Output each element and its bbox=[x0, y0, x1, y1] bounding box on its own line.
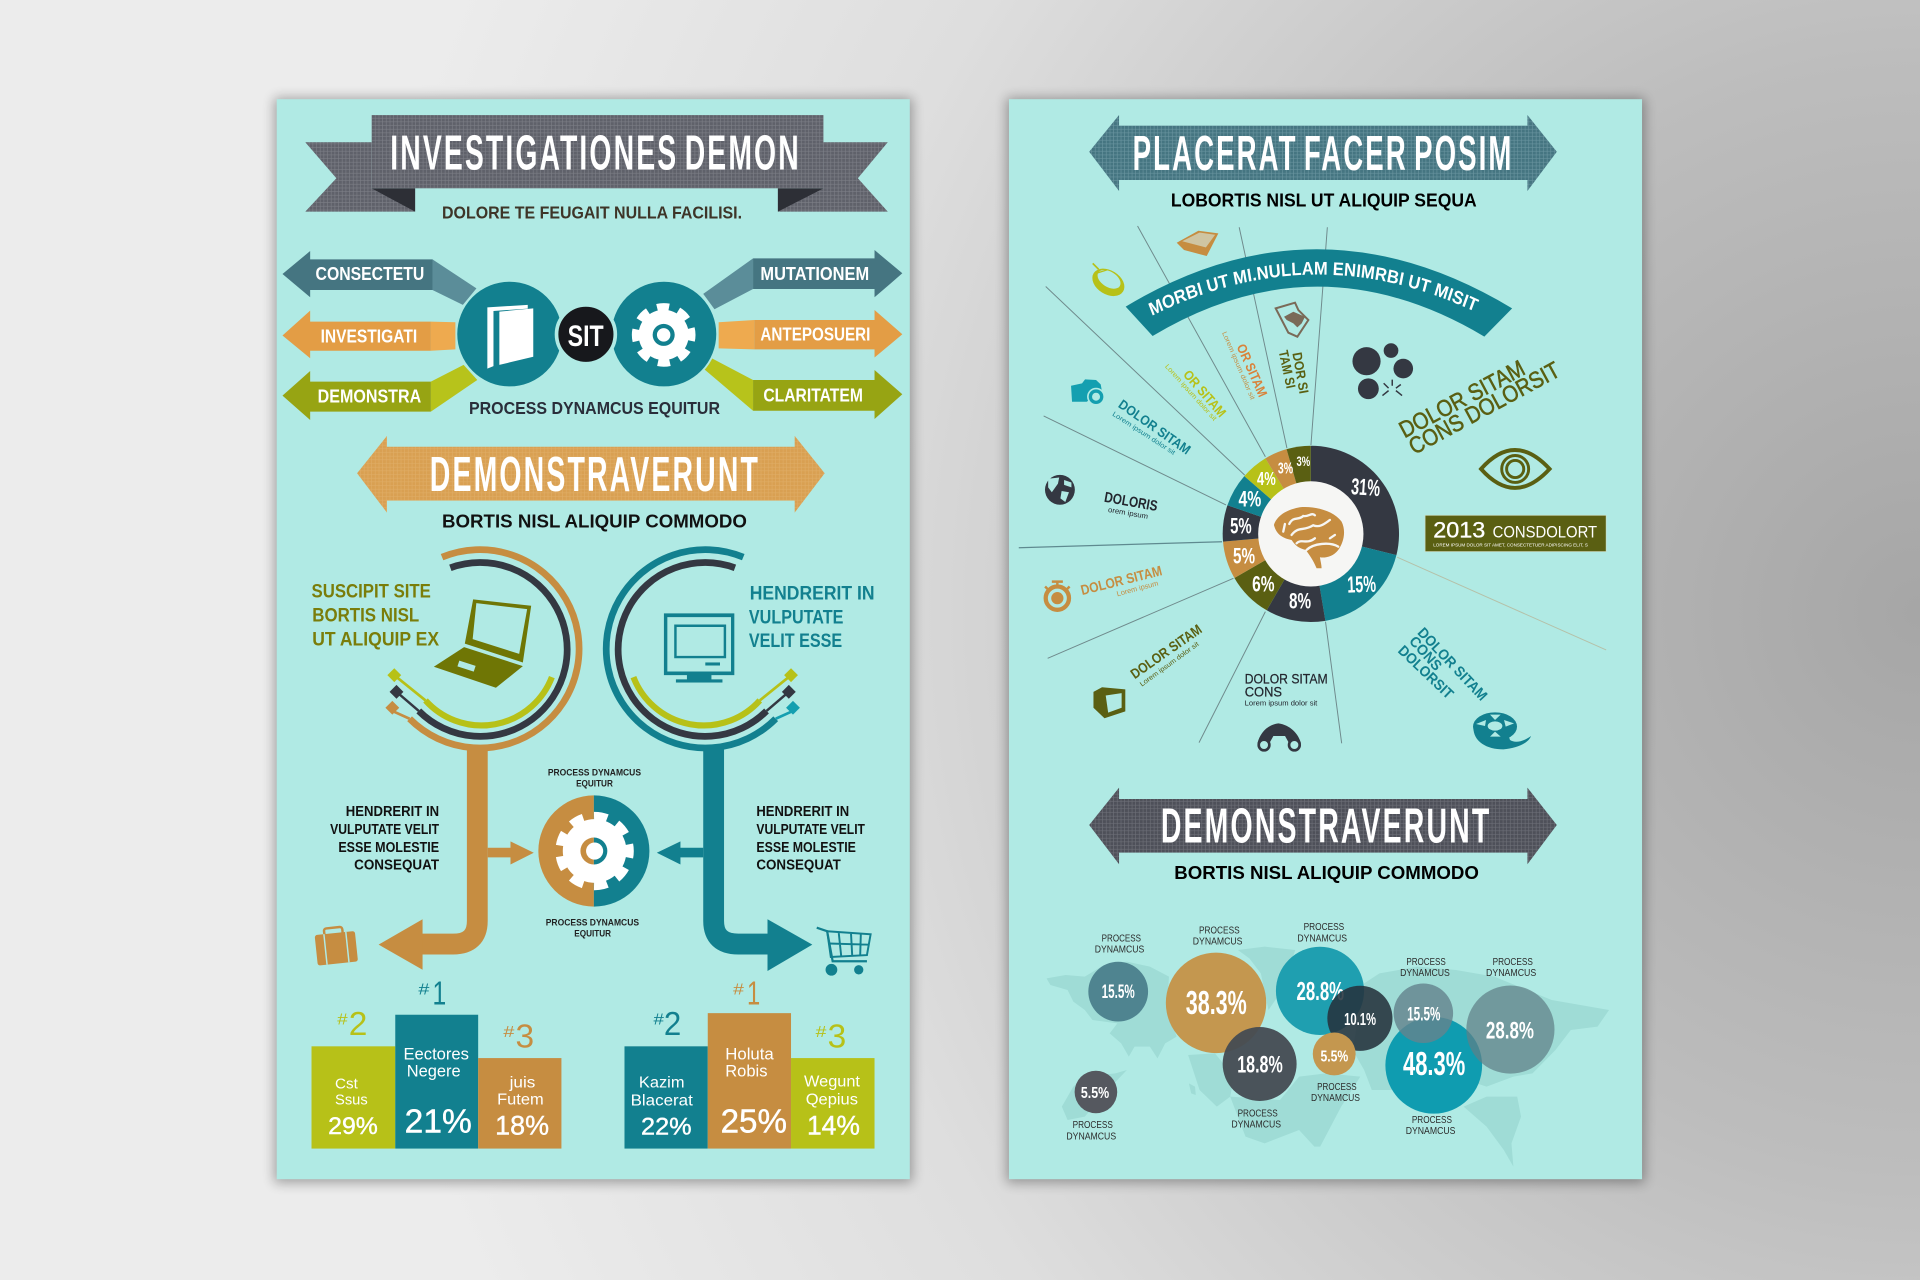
bubble: 28.8 grey bbox=[1466, 985, 1554, 1074]
icon: gear bbox=[611, 281, 717, 387]
callout: 2013 bbox=[1425, 515, 1606, 552]
title arrow bbox=[1089, 115, 1557, 191]
podium: right bbox=[624, 976, 875, 1149]
bar: juis futem: 18% bbox=[495, 1111, 549, 1141]
bar: cst ssus: 2 bbox=[349, 1006, 367, 1043]
icon: monitor bbox=[664, 613, 734, 683]
left arrows bbox=[282, 251, 477, 420]
text: right description: CONSEQUAT bbox=[756, 858, 841, 874]
text: suscipit: BORTIS NISL bbox=[312, 606, 419, 627]
bubble: 18.8 bbox=[1223, 1027, 1297, 1101]
gear captions bbox=[546, 767, 641, 938]
bubble labels: DYNAMCUS bbox=[1297, 934, 1347, 945]
bubble: 15.5 grey bbox=[1394, 984, 1453, 1043]
bubble labels: DYNAMCUS bbox=[1486, 968, 1537, 979]
bar: kazim blacerat: 22% bbox=[641, 1113, 692, 1140]
icon: brain bbox=[1274, 507, 1344, 568]
icon: newspaper bbox=[1177, 231, 1218, 256]
icon: mouse bbox=[1087, 263, 1129, 302]
stem arrow: right bbox=[657, 748, 812, 971]
pie labels: 3% bbox=[1278, 460, 1293, 477]
pie labels: 31% bbox=[1350, 473, 1381, 501]
bubble labels: DYNAMCUS bbox=[1406, 1126, 1456, 1137]
bubble labels: DYNAMCUS bbox=[1231, 1119, 1281, 1130]
label: dolor sitam orange: DOLOR SITAM bbox=[1079, 562, 1164, 598]
bar: juis futem: juis bbox=[509, 1075, 535, 1092]
bar: eectores negere: 21% bbox=[405, 1104, 472, 1141]
bubble labels: PROCESS bbox=[1493, 957, 1533, 968]
bubble: 10.1: 10.1% bbox=[1344, 1009, 1376, 1029]
text: suscipit bbox=[312, 581, 439, 651]
text: left description: HENDRERIT IN bbox=[346, 804, 439, 820]
radial lines bbox=[1019, 226, 1606, 743]
arrow: anteposueri bbox=[719, 310, 902, 358]
gear captions: PROCESS DYNAMCUS bbox=[548, 767, 641, 777]
title arrow: PLACERAT FACER POSIM bbox=[1133, 127, 1513, 181]
label: dolor sitam cons dolorsit: CONS bbox=[1405, 634, 1444, 674]
label: or sitam green: OR SITAM bbox=[1180, 367, 1229, 420]
bar: cst ssus: 29% bbox=[328, 1113, 378, 1140]
callout: 2013: 2013 bbox=[1433, 517, 1485, 542]
pie labels: 15% bbox=[1347, 571, 1377, 598]
bubble: 5.5 dark bbox=[1075, 1071, 1117, 1113]
bubble labels: DYNAMCUS bbox=[1095, 945, 1145, 956]
bar: juis futem: # bbox=[503, 1024, 515, 1041]
bubble: 48.3: 48.3% bbox=[1403, 1046, 1465, 1083]
bar: holuta robis: # bbox=[733, 981, 744, 998]
bar: juis futem: Futem bbox=[497, 1091, 544, 1108]
bar: cst ssus bbox=[312, 1006, 395, 1149]
text: hendrerit teal: VELIT ESSE bbox=[749, 631, 842, 652]
text: right description: ESSE MOLESTIE bbox=[756, 840, 856, 856]
icon: suitcase bbox=[314, 925, 358, 966]
center gear bbox=[538, 795, 649, 907]
bubble: 28.8 teal bbox=[1276, 947, 1364, 1035]
label: or sitam green bbox=[1163, 363, 1229, 423]
bubble: 10.1 bbox=[1327, 986, 1392, 1051]
icon: film reel bbox=[1473, 712, 1531, 749]
label: or sitam orange: Lorem ipsum dolor sit bbox=[1220, 331, 1256, 401]
bubble: 5.5 orange: 5.5% bbox=[1320, 1049, 1349, 1066]
icon: camera bbox=[1071, 379, 1105, 406]
icon: book bbox=[456, 281, 563, 387]
ring chart: right bbox=[606, 550, 800, 748]
gear captions: EQUITUR bbox=[576, 779, 613, 789]
pie labels: 5% bbox=[1233, 543, 1255, 568]
arrow: consectetu bbox=[282, 251, 476, 305]
label: dolor sitam olive: DOLOR SITAM bbox=[1127, 621, 1205, 682]
section arrow: demonstraverunt bbox=[1089, 788, 1557, 864]
bubble labels: PROCESS bbox=[1406, 957, 1446, 968]
arrow: investigati: INVESTIGATI bbox=[321, 325, 417, 346]
arrow: mutationem bbox=[703, 250, 902, 309]
label: or sitam orange: OR SITAM bbox=[1234, 342, 1270, 399]
bubble labels: PROCESS bbox=[1304, 922, 1345, 933]
label: dolor sitam teal: DOLOR SITAM bbox=[1116, 397, 1193, 457]
bar: juis futem: 3 bbox=[516, 1019, 534, 1056]
stem arrow: left bbox=[379, 748, 534, 970]
label: dolor sitam cons bbox=[1245, 670, 1328, 708]
caption: PROCESS DYNAMCUS EQUITUR bbox=[469, 398, 721, 418]
bar: wegunt qepius: 3 bbox=[828, 1019, 846, 1056]
bubble labels bbox=[1066, 922, 1537, 1142]
text: left description: ESSE MOLESTIE bbox=[338, 840, 439, 856]
bar: holuta robis: 1 bbox=[747, 976, 760, 1013]
text: left description bbox=[330, 804, 439, 874]
curved banner bbox=[1126, 249, 1512, 337]
bar: wegunt qepius: Wegunt bbox=[804, 1073, 861, 1090]
label: dolor sitam cons: Lorem ipsum dolor sit bbox=[1245, 699, 1317, 708]
bubble: 5.5 dark: 5.5% bbox=[1081, 1085, 1109, 1102]
label: or sitam orange bbox=[1220, 331, 1270, 401]
bubble labels: PROCESS bbox=[1317, 1082, 1357, 1093]
bar: holuta robis: Holuta bbox=[725, 1044, 775, 1063]
arrow: claritatem: CLARITATEM bbox=[763, 385, 863, 406]
bar: kazim blacerat: Kazim bbox=[639, 1075, 684, 1092]
text: suscipit: UT ALIQUIP EX bbox=[312, 630, 439, 651]
text: right description: VULPUTATE VELIT bbox=[756, 822, 865, 838]
text: hendrerit teal: HENDRERIT IN bbox=[750, 583, 875, 604]
bubble: 28.8 grey: 28.8% bbox=[1486, 1017, 1534, 1044]
subtitle: DOLORE TE FEUGAIT NULLA FACILISI. bbox=[442, 202, 742, 222]
bar: kazim blacerat: 2 bbox=[664, 1006, 681, 1043]
text: left description: VULPUTATE VELIT bbox=[330, 822, 439, 838]
gear captions: PROCESS DYNAMCUS bbox=[546, 918, 639, 928]
bar: cst ssus: Ssus bbox=[335, 1092, 368, 1108]
subtitle: LOBORTIS NISL UT ALIQUIP SEQUA bbox=[1171, 190, 1477, 211]
label: dolor sitam orange: Lorem ipsum bbox=[1116, 578, 1159, 598]
bar: eectores negere: 1 bbox=[432, 976, 446, 1013]
bar: cst ssus: # bbox=[337, 1011, 348, 1028]
ring chart: left bbox=[385, 550, 579, 748]
pie labels: 6% bbox=[1252, 571, 1275, 596]
icon: stopwatch bbox=[1045, 582, 1070, 610]
bubble labels: PROCESS bbox=[1102, 934, 1141, 945]
label: dolor sitam cons dolorsit olive: DOLOR SITAM bbox=[1395, 355, 1529, 443]
title ribbon: INVESTIGATIONES DEMON bbox=[390, 126, 801, 180]
bubble: 38.3 bbox=[1166, 953, 1266, 1053]
bar: eectores negere: # bbox=[418, 981, 430, 998]
label: dolor sitam cons: CONS bbox=[1245, 684, 1282, 700]
text: hendrerit teal bbox=[749, 583, 875, 652]
bar: juis futem bbox=[478, 1019, 561, 1149]
bar: wegunt qepius bbox=[791, 1019, 875, 1149]
curved banner: MORBI UT MI.NULLAM ENIMRBI UT MISIT bbox=[1148, 262, 1480, 316]
label: doloris: DOLORIS bbox=[1103, 490, 1159, 515]
bubble labels: PROCESS bbox=[1412, 1115, 1452, 1126]
bubble labels: PROCESS bbox=[1199, 925, 1240, 936]
arrow: claritatem bbox=[703, 358, 902, 419]
section arrow: demonstraverunt: DEMONSTRAVERUNT bbox=[1161, 800, 1491, 854]
bar: kazim blacerat: # bbox=[654, 1011, 664, 1028]
arrow: to gear right bbox=[657, 841, 703, 864]
pie labels: 5% bbox=[1230, 513, 1252, 538]
bar: wegunt qepius: Qepius bbox=[806, 1091, 858, 1108]
bubble: 48.3 bbox=[1385, 1017, 1482, 1114]
circles bbox=[456, 281, 717, 387]
label: dolor sitam cons: DOLOR SITAM bbox=[1245, 670, 1328, 686]
sit badge: SIT bbox=[568, 320, 604, 353]
podium: left bbox=[312, 976, 561, 1149]
label: dolor sitam olive: Lorem ipsum dolor sit bbox=[1139, 641, 1201, 688]
arrow: anteposueri: ANTEPOSUERI bbox=[760, 324, 870, 345]
label: dolor sitam cons dolorsit olive: CONS DOLORSIT bbox=[1404, 357, 1564, 459]
bubble labels: DYNAMCUS bbox=[1193, 936, 1243, 947]
label: or sitam green: Lorem ipsum dolor sit bbox=[1163, 363, 1218, 423]
pie labels: 4% bbox=[1238, 486, 1262, 511]
bar: eectores negere bbox=[395, 976, 478, 1149]
pie chart bbox=[1045, 231, 1609, 1167]
text: hendrerit teal: VULPUTATE bbox=[749, 607, 843, 628]
arrow: mutationem: MUTATIONEM bbox=[760, 263, 869, 284]
callout: 2013: CONSDOLORT bbox=[1493, 522, 1597, 541]
icon: globe bbox=[1045, 475, 1075, 505]
icon: map bbox=[1276, 303, 1308, 337]
section subtitle: BORTIS NISL ALIQUIP COMMODO bbox=[442, 510, 747, 531]
bubble labels: PROCESS bbox=[1238, 1109, 1278, 1120]
bubble labels: DYNAMCUS bbox=[1400, 968, 1450, 979]
arrow: investigati bbox=[282, 311, 455, 358]
bar: eectores negere: Negere bbox=[407, 1061, 461, 1080]
panel: left poster bbox=[277, 99, 910, 1179]
bubble chart bbox=[1075, 947, 1554, 1114]
arrow: demonstra bbox=[282, 365, 477, 420]
text: left description: CONSEQUAT bbox=[354, 858, 439, 874]
bar: cst ssus: Cst bbox=[335, 1077, 358, 1093]
bar: kazim blacerat: Blacerat bbox=[631, 1093, 693, 1110]
text: suscipit: SUSCIPIT SITE bbox=[312, 581, 431, 602]
arrow: to gear left bbox=[488, 841, 534, 864]
bubble: 15.5 grey: 15.5% bbox=[1407, 1005, 1440, 1026]
icon: bubbles bbox=[1352, 343, 1413, 399]
bubble: 15.5 bbox=[1088, 962, 1148, 1021]
pie labels: 8% bbox=[1289, 588, 1311, 613]
bubble labels: PROCESS bbox=[1073, 1120, 1113, 1131]
section banner: demonstraverunt: DEMONSTRAVERUNT bbox=[430, 448, 760, 502]
bubble: 15.5: 15.5% bbox=[1102, 982, 1135, 1003]
label: doloris: orem ipsum bbox=[1107, 505, 1149, 521]
arrow: consectetu: CONSECTETU bbox=[316, 263, 424, 284]
label: dolor sitam cons dolorsit: DOLORSIT bbox=[1394, 643, 1456, 703]
icon: eye bbox=[1481, 450, 1550, 488]
icon: binoculars bbox=[1257, 723, 1301, 750]
bubble labels: DYNAMCUS bbox=[1311, 1093, 1360, 1104]
label: dor si: DOR SI bbox=[1289, 351, 1311, 395]
bar: holuta robis: Robis bbox=[725, 1061, 768, 1080]
panel: right poster bbox=[1009, 99, 1642, 1180]
bar: holuta robis: 25% bbox=[721, 1104, 787, 1141]
label: dolor sitam teal: Lorem ipsum dolor sit bbox=[1111, 411, 1176, 457]
gear captions: EQUITUR bbox=[574, 928, 611, 938]
pie labels: 3% bbox=[1296, 454, 1310, 469]
arrow: demonstra: DEMONSTRA bbox=[318, 386, 421, 407]
bubble: 38.3: 38.3% bbox=[1186, 985, 1247, 1022]
sit badge bbox=[557, 305, 615, 364]
panel shadows bbox=[274, 98, 1644, 1183]
icon: laptop bbox=[434, 599, 531, 688]
bubble labels: DYNAMCUS bbox=[1066, 1131, 1117, 1142]
callout: 2013: LOREM IPSUM DOLOR SIT AMET, CONSECTETUER ADIPISCING ELIT, S bbox=[1433, 543, 1589, 549]
title ribbon bbox=[305, 115, 888, 212]
bar: kazim blacerat bbox=[624, 1006, 708, 1149]
world map bbox=[1047, 947, 1609, 1167]
bar: holuta robis bbox=[708, 976, 791, 1149]
icon: tv box bbox=[1093, 687, 1125, 718]
section banner: demonstraverunt bbox=[357, 436, 825, 513]
bar: wegunt qepius: 14% bbox=[807, 1110, 860, 1140]
bubble: 18.8: 18.8% bbox=[1237, 1051, 1283, 1078]
text: right description bbox=[756, 804, 865, 874]
text: right description: HENDRERIT IN bbox=[756, 804, 849, 820]
bar: wegunt qepius: # bbox=[816, 1024, 827, 1041]
right arrows bbox=[703, 250, 902, 419]
label: dor si bbox=[1276, 349, 1311, 395]
bubble: 28.8 teal: 28.8% bbox=[1296, 978, 1344, 1006]
bubble: 5.5 orange bbox=[1313, 1032, 1356, 1075]
label: dolor sitam cons dolorsit: DOLOR SITAM bbox=[1414, 625, 1490, 704]
icon: cart bbox=[817, 928, 871, 975]
pie labels bbox=[1230, 454, 1381, 613]
pie labels: 4% bbox=[1257, 468, 1276, 489]
bar: eectores negere: Eectores bbox=[403, 1044, 469, 1063]
label: dor si: TAM SI bbox=[1276, 349, 1298, 390]
section subtitle: BORTIS NISL ALIQUIP COMMODO bbox=[1174, 862, 1479, 883]
